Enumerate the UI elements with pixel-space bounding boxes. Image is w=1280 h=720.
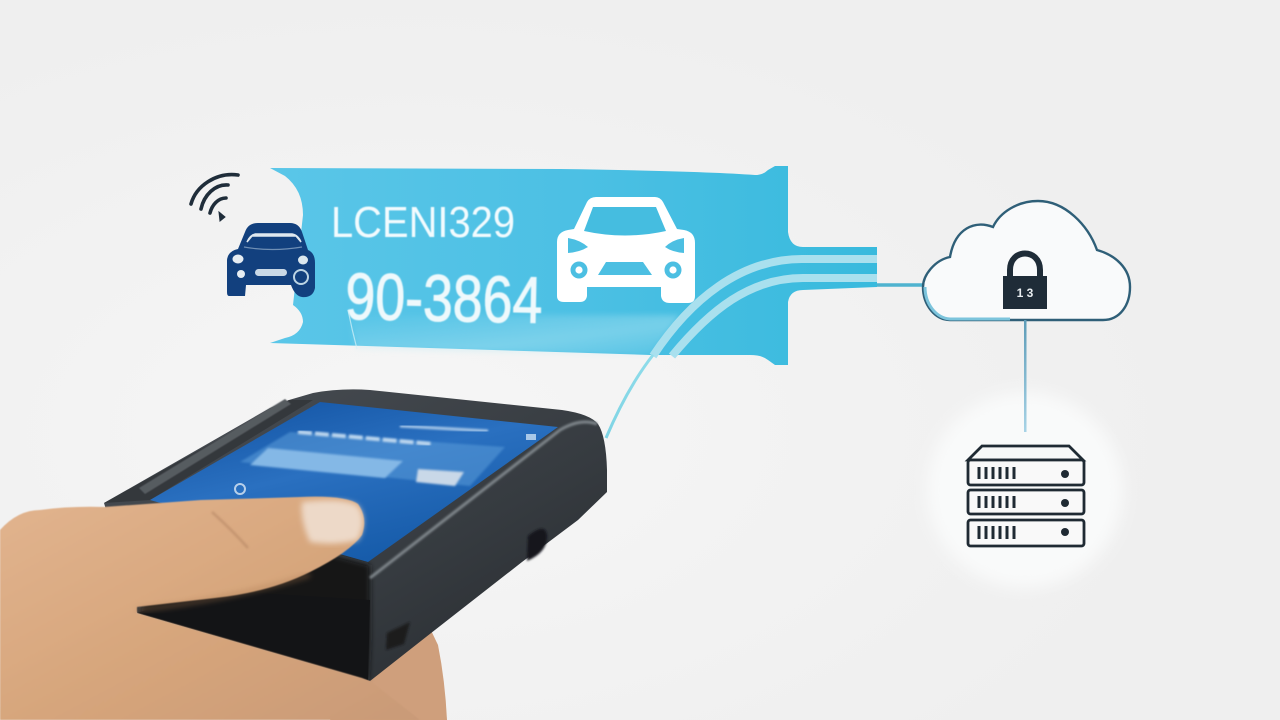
link: cloud connector — [877, 283, 925, 287]
data stripes — [653, 259, 877, 356]
scanned plate banner — [270, 166, 877, 365]
lock — [1003, 254, 1047, 309]
scan beam — [606, 355, 653, 438]
plate text line 2: 90-3864 — [345, 259, 543, 337]
thumb nail — [302, 500, 363, 544]
handheld scanner — [104, 389, 607, 681]
plate text line 1: LCENI329 — [331, 198, 515, 247]
hand holding scanner — [0, 497, 420, 720]
link: cloud to server — [1024, 320, 1026, 432]
icon: cloud with lock — [923, 201, 1130, 320]
side rail — [139, 399, 291, 494]
icon: server stack — [968, 446, 1084, 546]
thumb crease — [212, 512, 248, 548]
icon: wifi signal — [191, 175, 238, 221]
scanner bezel highlight — [370, 422, 597, 578]
scanner side port — [527, 529, 547, 561]
icon: navy car — [227, 223, 315, 297]
screen — [150, 402, 558, 562]
scanner body — [104, 389, 607, 681]
lower finger behind scanner — [330, 620, 447, 720]
server halo — [927, 392, 1123, 588]
icon: white car — [557, 197, 695, 303]
lock: 1 3 — [1017, 286, 1034, 300]
